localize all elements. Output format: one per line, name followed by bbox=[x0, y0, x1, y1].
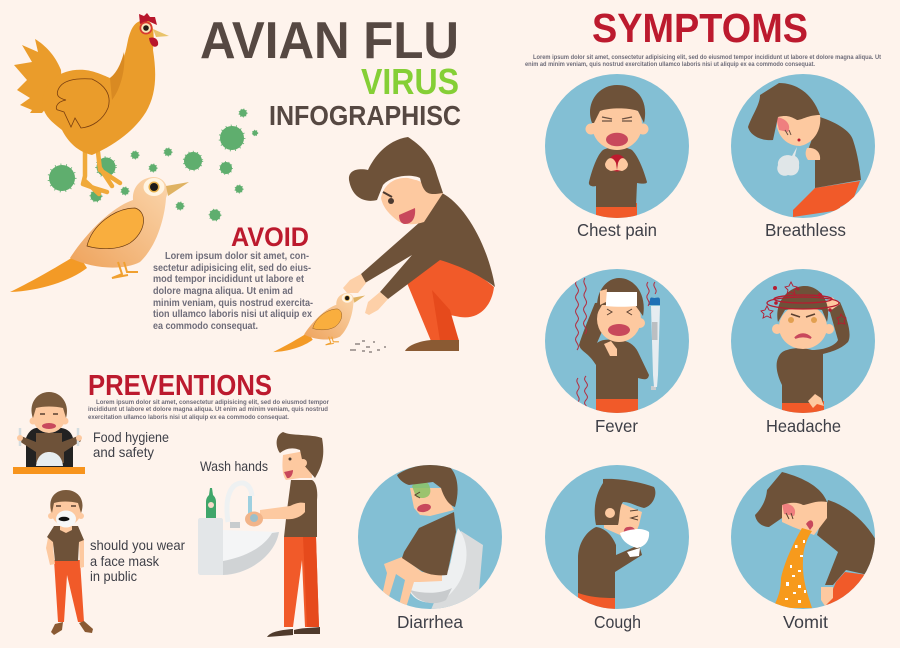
heading: symptoms: SYMPTOMS bbox=[592, 5, 808, 51]
label: cough: Cough bbox=[594, 612, 641, 632]
text block: avoid: ea commodo consequat. bbox=[153, 321, 258, 332]
icon: man with face mask bbox=[46, 490, 93, 635]
panel: fever bbox=[545, 269, 689, 415]
icon: peach bird bbox=[10, 177, 189, 292]
text block: symptoms: enim ad minim veniam, quis nostrud exercitation ullamco laboris nisi ut aliquip ex ea commodo consequat. bbox=[525, 61, 815, 68]
text block: preventions: Lorem ipsum dolor sit amet, consectetur adipisicing elit, sed do eiusmod tempor bbox=[96, 399, 329, 406]
panel: diarrhea bbox=[358, 464, 502, 614]
label: fever: Fever bbox=[595, 416, 638, 436]
text block: avoid: tion ullamco laboris nisi ut aliquip ex bbox=[153, 309, 312, 320]
text block: avoid: mod tempor incididunt ut labore et bbox=[153, 274, 304, 285]
text block: avoid: Lorem ipsum dolor sit amet, con- bbox=[165, 251, 309, 262]
panel: headache bbox=[731, 269, 875, 415]
title: AVIAN FLU bbox=[200, 12, 459, 70]
text block: preventions: exercitation ullamco laboris nisi ut aliquip ex ea commodo consequat. bbox=[88, 414, 289, 421]
text block: avoid: minim veniam, quis nostrud exercita- bbox=[153, 298, 313, 309]
text block: preventions: incididunt ut labore et dolore magna aliqua. Ut enim ad minim veniam, quis nostrud bbox=[88, 406, 328, 413]
text block: preventions bbox=[88, 399, 329, 421]
label: food hygiene: and safety bbox=[93, 444, 154, 460]
label: headache: Headache bbox=[766, 416, 841, 436]
label: face mask: in public bbox=[90, 568, 137, 584]
icon: man eating bbox=[13, 392, 85, 474]
label: face mask bbox=[90, 537, 185, 584]
text block: avoid: dolore magna aliqua. Ut enim ad bbox=[153, 286, 293, 297]
title bbox=[200, 12, 461, 131]
text block: avoid: sectetur adipisicing elit, sed do eius- bbox=[153, 263, 311, 274]
heading: preventions: PREVENTIONS bbox=[88, 370, 272, 402]
panel: vomit bbox=[731, 465, 877, 609]
icon: man washing hands bbox=[245, 432, 323, 637]
label: chest pain: Chest pain bbox=[577, 220, 657, 240]
label: face mask: should you wear bbox=[90, 537, 185, 553]
label: food hygiene bbox=[93, 429, 169, 460]
heading: avoid: AVOID bbox=[231, 222, 309, 252]
label: breathless: Breathless bbox=[765, 220, 846, 240]
icon: sink and bottle bbox=[198, 483, 279, 575]
label: vomit: Vomit bbox=[783, 612, 828, 632]
label: diarrhea: Diarrhea bbox=[397, 612, 463, 632]
icon: virus particles bbox=[49, 109, 258, 220]
title: VIRUS bbox=[361, 61, 459, 102]
text block: symptoms bbox=[525, 54, 882, 68]
text block: avoid bbox=[153, 251, 313, 332]
panel: breathless bbox=[731, 74, 875, 218]
label: face mask: a face mask bbox=[90, 553, 160, 569]
icon: crouching man with small bird bbox=[273, 137, 495, 352]
icon: chicken bbox=[14, 13, 169, 194]
label: wash hands: Wash hands bbox=[200, 458, 268, 474]
panel: chest pain bbox=[545, 74, 689, 219]
title: INFOGRAPHISC bbox=[269, 100, 461, 131]
panel: cough bbox=[545, 465, 689, 612]
label: food hygiene: Food hygiene bbox=[93, 429, 169, 445]
